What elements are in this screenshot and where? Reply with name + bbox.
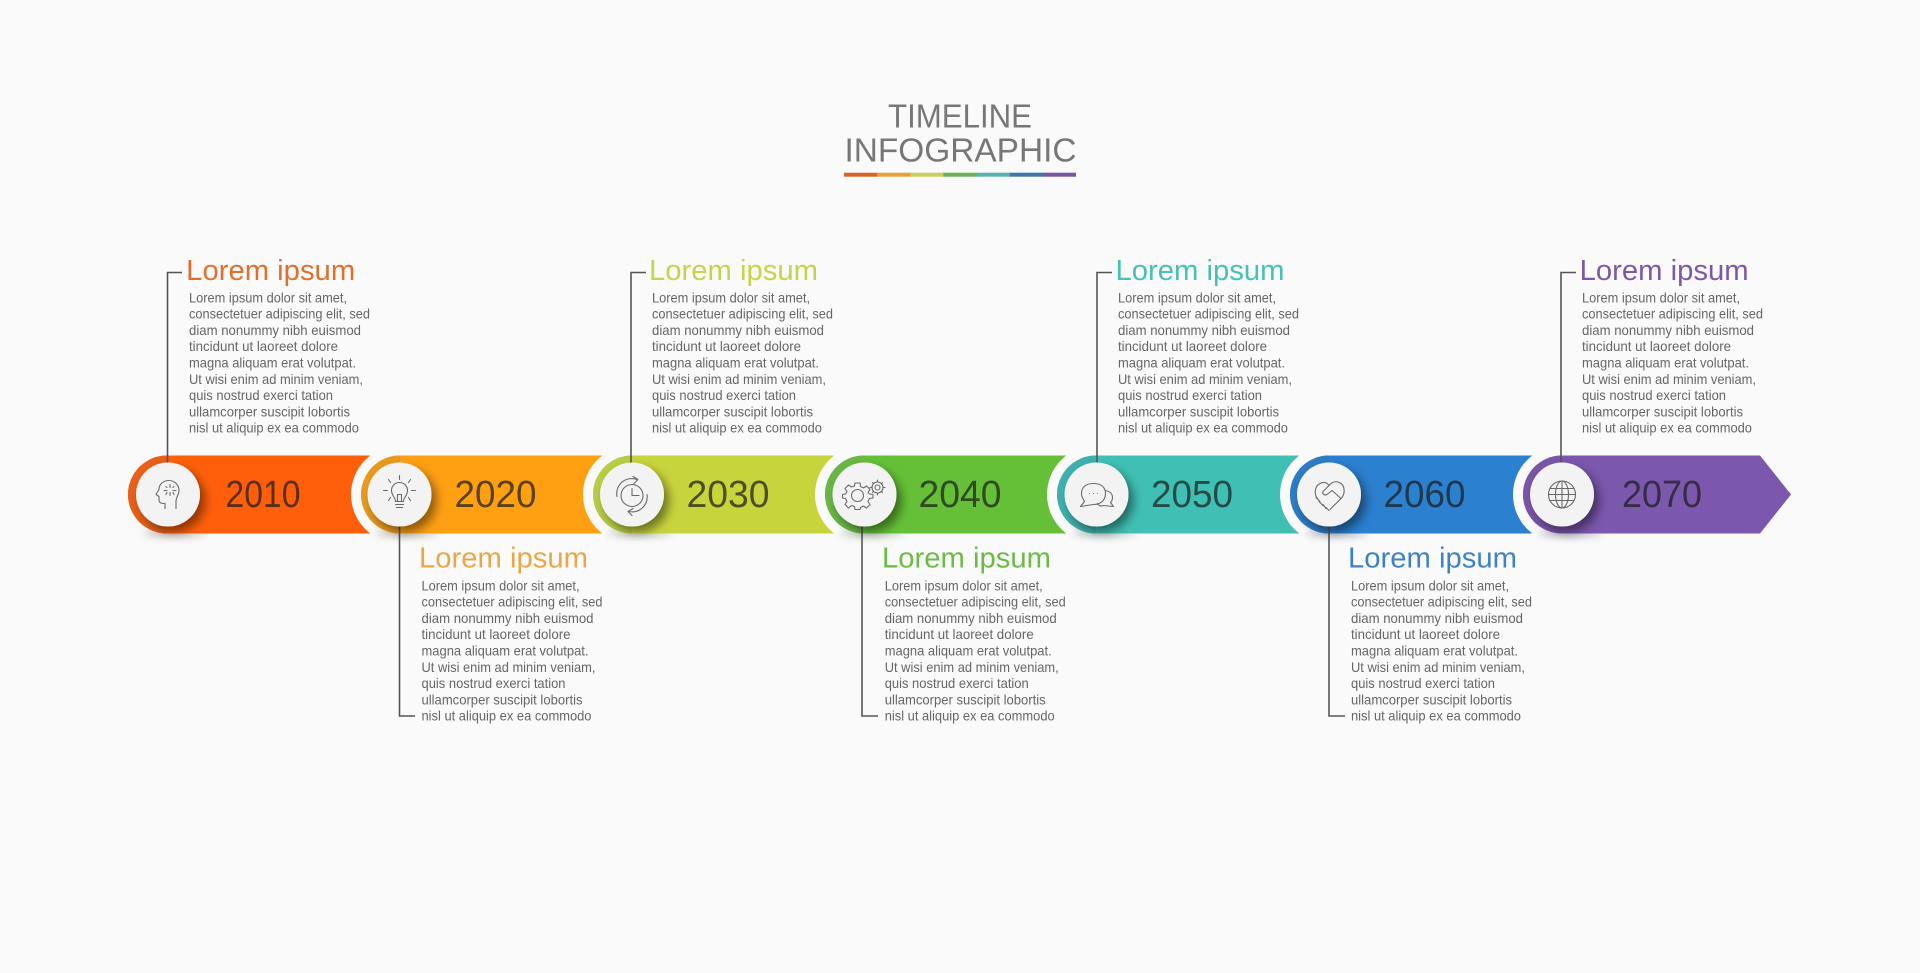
text block: 2040: nisl ut aliquip ex ea commodo: [885, 709, 1055, 724]
text block: 2030: nisl ut aliquip ex ea commodo: [652, 421, 822, 436]
text block: 2050: consectetuer adipiscing elit, sed: [1118, 307, 1299, 322]
segment arrow: 2070: [1513, 446, 1791, 544]
icon circle: gears: [832, 462, 896, 526]
text block: 2050: magna aliquam erat volutpat.: [1118, 355, 1285, 370]
text block: 2030: Lorem ipsum dolor sit amet,: [652, 290, 810, 305]
text block: 2020: Lorem ipsum: [419, 543, 588, 575]
text block: 2070: quis nostrud exerci tation: [1582, 388, 1726, 403]
text block: 2070: nisl ut aliquip ex ea commodo: [1582, 421, 1752, 436]
text block: 2010: consectetuer adipiscing elit, sed: [189, 307, 370, 322]
text block: 2060: ullamcorper suscipit lobortis: [1351, 692, 1512, 707]
text block: 2030: [649, 255, 833, 436]
icon circle: speech bubbles: [1064, 462, 1128, 526]
text block: 2020: Ut wisi enim ad minim veniam,: [422, 660, 596, 675]
year labels: [226, 474, 1702, 516]
segment bar: 2030: [583, 446, 864, 544]
text block: 2040: consectetuer adipiscing elit, sed: [885, 595, 1066, 610]
text block: 2010: tincidunt ut laoreet dolore: [189, 339, 338, 354]
text block: 2030: ullamcorper suscipit lobortis: [652, 404, 813, 419]
text block: 2010: diam nonummy nibh euismod: [189, 323, 361, 338]
text block: 2040: diam nonummy nibh euismod: [885, 611, 1057, 626]
text block: 2070: ullamcorper suscipit lobortis: [1582, 404, 1743, 419]
text block: 2070: Lorem ipsum: [1580, 255, 1749, 287]
text block: 2050: quis nostrud exerci tation: [1118, 388, 1262, 403]
text block: 2050: [1116, 255, 1299, 436]
year labels: 2010: [226, 474, 300, 516]
text block: 2010: [186, 255, 370, 436]
text block: 2030: Lorem ipsum: [649, 255, 818, 287]
text block: 2050: nisl ut aliquip ex ea commodo: [1118, 421, 1288, 436]
text block: 2060: magna aliquam erat volutpat.: [1351, 643, 1518, 658]
icon circle: clock with arrows: [600, 462, 664, 526]
icon circle: globe: [1530, 462, 1594, 526]
title: TIMELINE: [888, 99, 1032, 136]
icon circle: handshake: [1297, 462, 1361, 526]
text block: 2040: quis nostrud exerci tation: [885, 676, 1029, 691]
text block: 2060: nisl ut aliquip ex ea commodo: [1351, 709, 1521, 724]
text block: 2060: Lorem ipsum dolor sit amet,: [1351, 578, 1509, 593]
text block: 2060: quis nostrud exerci tation: [1351, 676, 1495, 691]
text block: 2030: quis nostrud exerci tation: [652, 388, 796, 403]
year labels: 2030: [686, 474, 770, 516]
text block: 2040: magna aliquam erat volutpat.: [885, 643, 1052, 658]
year labels: 2060: [1384, 474, 1466, 516]
text block: 2010: nisl ut aliquip ex ea commodo: [189, 421, 359, 436]
connector lines: [168, 272, 1576, 716]
text block: 2020: consectetuer adipiscing elit, sed: [422, 595, 602, 610]
text block: 2060: Lorem ipsum: [1348, 543, 1517, 575]
year labels: 2020: [454, 474, 536, 516]
text block: 2010: Lorem ipsum: [186, 255, 355, 287]
text block: 2050: tincidunt ut laoreet dolore: [1118, 339, 1267, 354]
rainbow title underline: [844, 173, 1076, 177]
text block: 2060: diam nonummy nibh euismod: [1351, 611, 1523, 626]
segment bar: 2010: [128, 456, 399, 538]
text block: 2040: [882, 543, 1066, 724]
text block: 2060: tincidunt ut laoreet dolore: [1351, 627, 1500, 642]
text block: 2030: tincidunt ut laoreet dolore: [652, 339, 801, 354]
text block: 2050: diam nonummy nibh euismod: [1118, 323, 1290, 338]
text block: 2040: tincidunt ut laoreet dolore: [885, 627, 1034, 642]
text block: 2030: diam nonummy nibh euismod: [652, 323, 824, 338]
text block: 2010: Ut wisi enim ad minim veniam,: [189, 372, 363, 387]
icon circle: head: [136, 462, 200, 526]
title: INFOGRAPHIC: [844, 133, 1076, 170]
text block: 2070: Lorem ipsum dolor sit amet,: [1582, 290, 1740, 305]
text block: 2050: ullamcorper suscipit lobortis: [1118, 404, 1279, 419]
text block: 2040: Ut wisi enim ad minim veniam,: [885, 660, 1059, 675]
text block: 2070: consectetuer adipiscing elit, sed: [1582, 307, 1763, 322]
text block: 2010: ullamcorper suscipit lobortis: [189, 404, 350, 419]
text block: 2030: magna aliquam erat volutpat.: [652, 355, 819, 370]
text block: 2020: [419, 543, 602, 724]
text block: 2030: Ut wisi enim ad minim veniam,: [652, 372, 826, 387]
text block: 2030: consectetuer adipiscing elit, sed: [652, 307, 833, 322]
text block: 2040: Lorem ipsum dolor sit amet,: [885, 578, 1043, 593]
year labels: 2070: [1622, 474, 1702, 516]
text block: 2060: consectetuer adipiscing elit, sed: [1351, 595, 1532, 610]
text block: 2070: tincidunt ut laoreet dolore: [1582, 339, 1731, 354]
text block: 2020: diam nonummy nibh euismod: [422, 611, 594, 626]
text block: 2040: ullamcorper suscipit lobortis: [885, 692, 1046, 707]
segment bar: 2020: [351, 446, 632, 544]
year labels: 2040: [918, 474, 1002, 516]
text block: 2070: [1580, 255, 1763, 436]
text block: 2040: Lorem ipsum: [882, 543, 1051, 575]
text block: 2020: magna aliquam erat volutpat.: [422, 643, 588, 658]
text block: 2020: Lorem ipsum dolor sit amet,: [422, 578, 580, 593]
text block: 2070: diam nonummy nibh euismod: [1582, 323, 1754, 338]
icon circle: light bulb: [368, 462, 432, 526]
text block: 2050: Lorem ipsum dolor sit amet,: [1118, 290, 1276, 305]
text block: 2060: Ut wisi enim ad minim veniam,: [1351, 660, 1525, 675]
segment bar: 2060: [1280, 446, 1562, 544]
segment bar: 2040: [815, 446, 1096, 544]
text block: 2070: magna aliquam erat volutpat.: [1582, 355, 1749, 370]
text block: 2020: tincidunt ut laoreet dolore: [422, 627, 570, 642]
title: [844, 99, 1076, 170]
segment bar: 2050: [1047, 446, 1329, 544]
text block: 2060: [1348, 543, 1532, 724]
text block: 2020: ullamcorper suscipit lobortis: [422, 692, 583, 707]
text block: 2020: quis nostrud exerci tation: [422, 676, 566, 691]
text block: 2070: Ut wisi enim ad minim veniam,: [1582, 372, 1756, 387]
text block: 2010: Lorem ipsum dolor sit amet,: [189, 290, 347, 305]
year labels: 2050: [1151, 474, 1233, 516]
text block: 2050: Ut wisi enim ad minim veniam,: [1118, 372, 1292, 387]
text block: 2020: nisl ut aliquip ex ea commodo: [422, 709, 592, 724]
text block: 2050: Lorem ipsum: [1116, 255, 1284, 287]
text block: 2010: quis nostrud exerci tation: [189, 388, 333, 403]
text block: 2010: magna aliquam erat volutpat.: [189, 355, 356, 370]
